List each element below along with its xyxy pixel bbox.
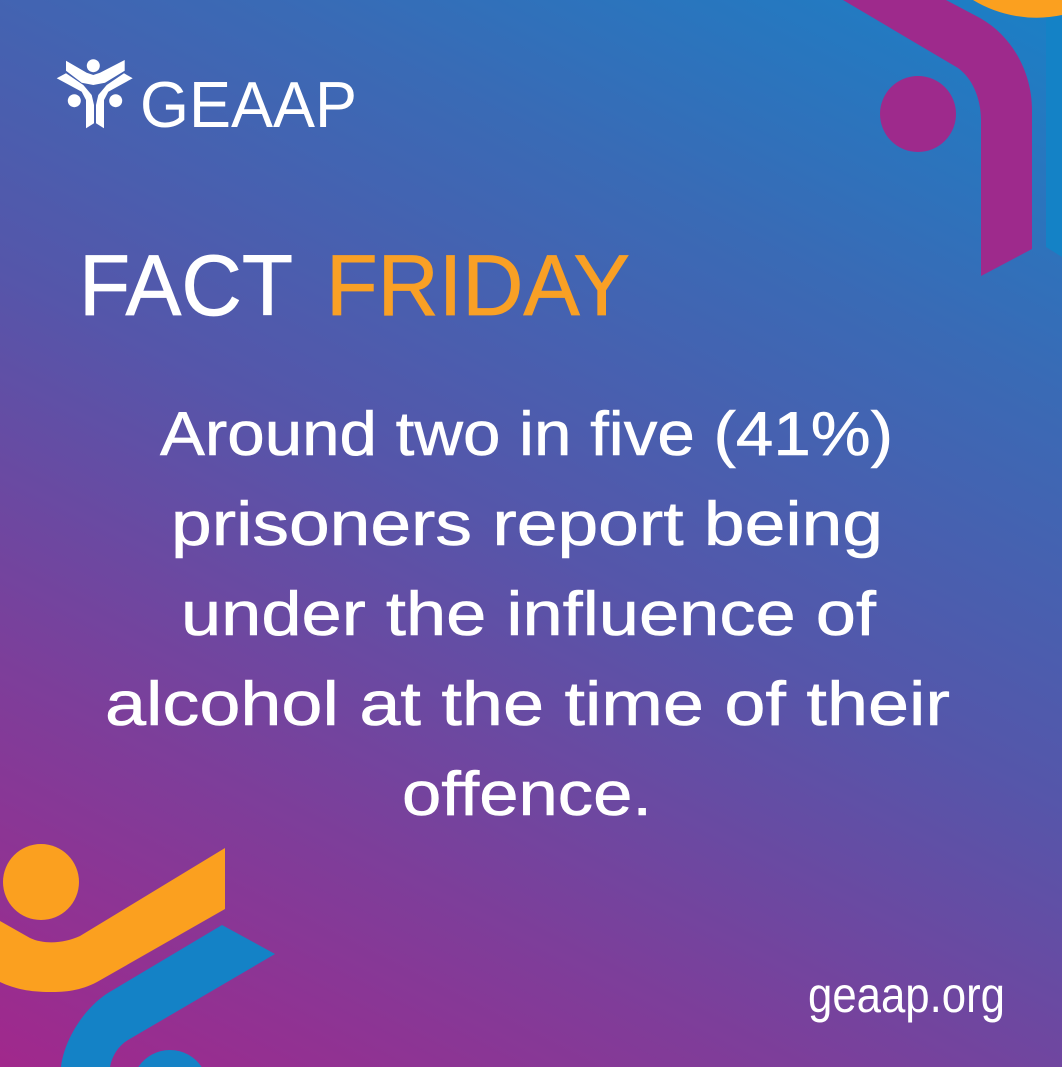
main fact text: prisoners report being [171, 490, 883, 559]
title: FACT [79, 238, 293, 334]
blue band [61, 925, 275, 1067]
decoration: bottom left shapes [0, 844, 275, 1067]
main fact text: under the influence of [181, 580, 877, 649]
main fact text: alcohol at the time of their [105, 670, 950, 739]
orange circle [973, 0, 1062, 18]
main fact text [105, 400, 950, 829]
title [79, 238, 630, 334]
main fact text: Around two in five (41%) [160, 400, 893, 469]
purple band [843, 0, 1032, 276]
decoration: top right shapes [843, 0, 1062, 276]
title: FRIDAY [326, 238, 630, 334]
orange band [0, 848, 225, 992]
main fact text: offence. [402, 760, 652, 829]
purple circle [880, 76, 956, 152]
logo icon [57, 59, 133, 128]
orange circle [3, 844, 79, 920]
logo wordmark: GEAAP [140, 68, 357, 141]
blue circle [138, 1050, 202, 1067]
website url: geaap.org [808, 967, 1005, 1023]
blue strip [1046, 0, 1062, 257]
logo [57, 59, 357, 141]
